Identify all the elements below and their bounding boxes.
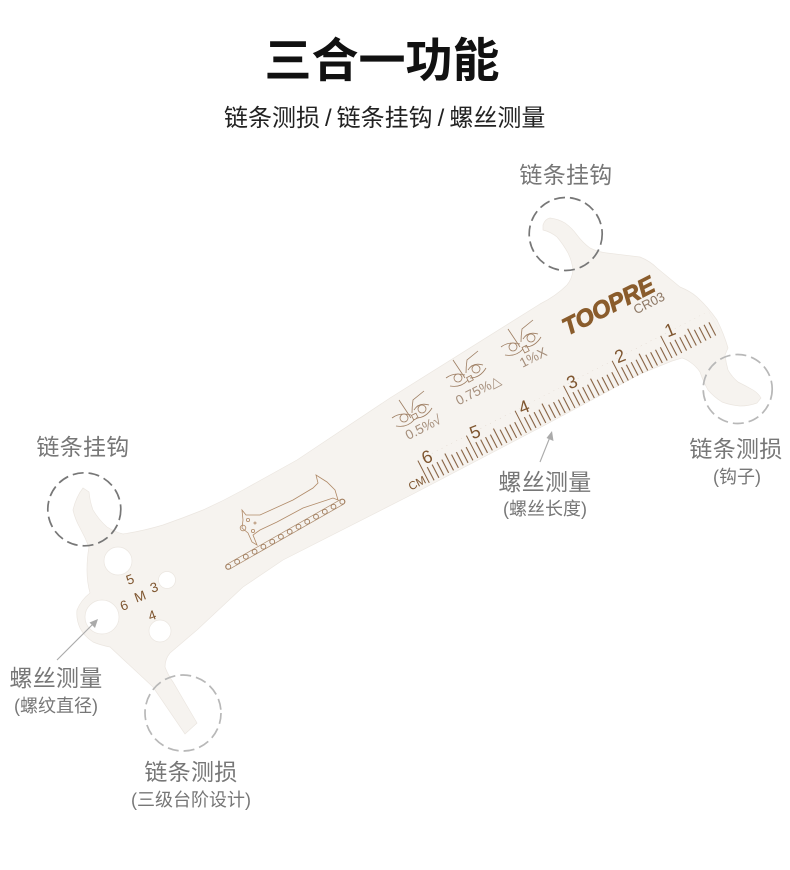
thread size markings: 5 [124,571,136,588]
label: thread diameter: (螺纹直径) [14,696,98,716]
callout circle: bottom step [145,675,221,751]
arrowhead: thread length [546,431,554,441]
label: step measure: (三级台阶设计) [131,790,251,810]
wear labels: 0.75%△ [453,372,504,408]
ruler ticks [417,311,720,483]
tool body outline [73,218,761,734]
ruler numbers: 2 [612,345,628,367]
thread size markings: 3 [148,579,160,596]
label: thread diameter [9,665,103,716]
thread size markings: M [132,587,148,605]
ruler numbers: 6 [419,446,435,468]
model number: CR03 [631,289,667,317]
engraved chain [226,499,345,569]
label: thread length [498,469,592,519]
ruler numbers [407,319,678,493]
label: top hook: 链条挂钩 [519,162,613,188]
label: right hook measure: 链条测损 [689,436,783,462]
label: left hook: 链条挂钩 [36,434,130,460]
callout circle: top hook [529,198,602,270]
label: step measure: 链条测损 [144,759,238,785]
callout circle: left hook [48,473,121,546]
engraved tool drawing [240,475,338,545]
arrowhead: thread diameter [90,619,98,628]
thread size markings: 6 [118,597,130,614]
arrow: thread length [540,437,550,462]
title: 三合一功能 [264,34,500,87]
ruler numbers: 4 [516,396,532,418]
label: thread length: 螺丝测量 [498,469,592,495]
label: step measure [131,759,251,810]
brand logo: TOOPRE [558,271,660,341]
wear labels: 0.5%√ [403,412,444,443]
subtitle: 链条测损/链条挂钩/螺丝测量 [224,105,545,132]
wear icon 1% [501,320,541,355]
arrow: thread diameter [57,623,94,660]
wear icon 0.75% [446,351,486,386]
ruler numbers: 3 [564,371,580,393]
wear icon 0.5% [392,391,432,426]
thread size markings [118,571,160,624]
wear labels [403,344,549,443]
label: right hook measure [689,436,783,487]
callout circle: right hook [703,354,772,424]
label: thread length: (螺丝长度) [503,499,587,519]
ruler numbers: 1 [662,319,678,341]
wear labels: 1%X [517,344,549,371]
ruler numbers: CM [407,474,428,493]
thread size markings: 4 [146,607,159,624]
label: thread diameter: 螺丝测量 [9,665,103,691]
ruler numbers: 5 [467,421,483,443]
label: right hook measure: (钩子) [713,467,761,487]
tool: chain checker [73,218,761,734]
